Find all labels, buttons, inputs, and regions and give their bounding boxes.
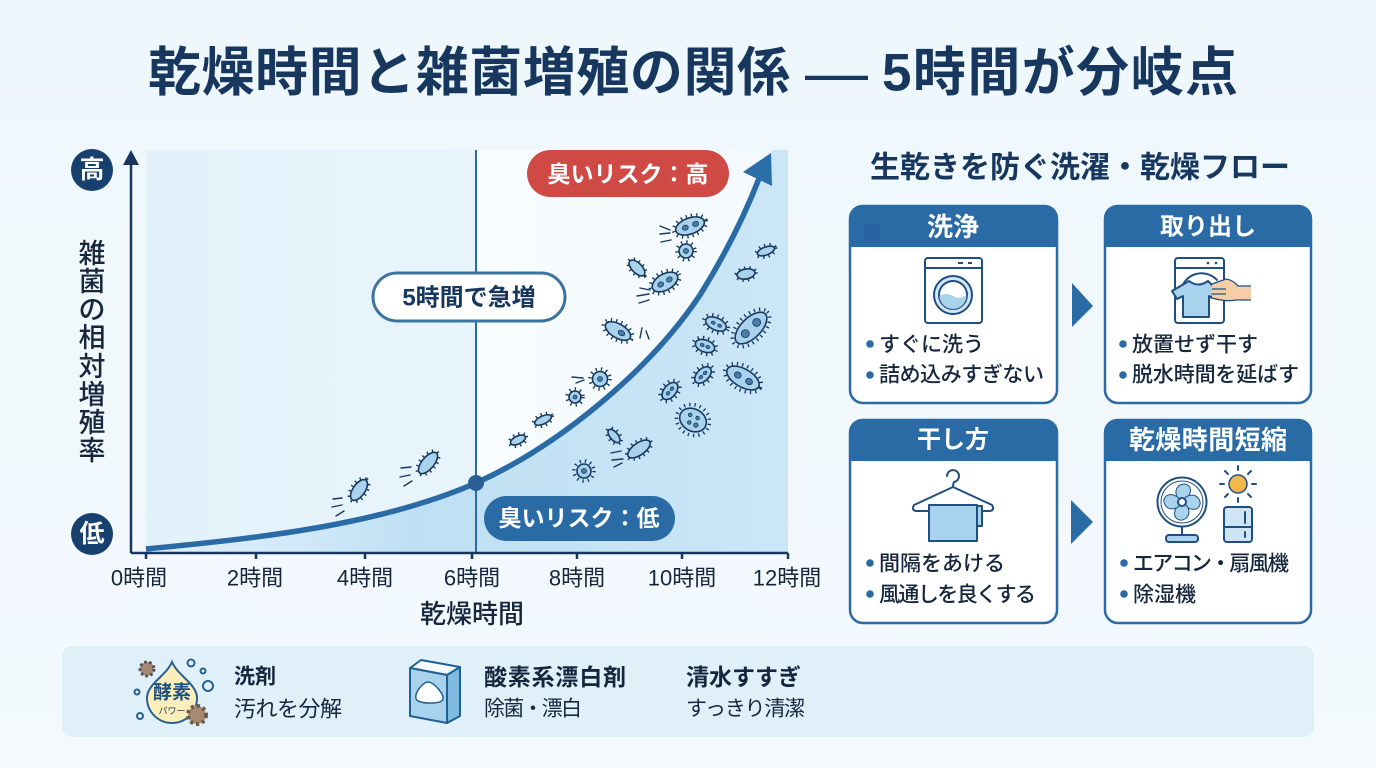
y axis label: 相	[78, 323, 106, 353]
card: hanging: 干し方	[917, 426, 989, 454]
icon: bleach box	[410, 660, 460, 723]
title	[148, 38, 1238, 108]
icon: sun	[1220, 466, 1256, 502]
icon: enzyme drop: パワー	[158, 706, 186, 716]
high badge	[71, 149, 113, 191]
card: take out	[1104, 205, 1312, 403]
5 hour marker line	[475, 150, 477, 553]
icon: fan	[1158, 478, 1206, 542]
x axis ticks: 12時間	[753, 566, 821, 590]
list	[866, 552, 1036, 606]
text: rinse	[686, 664, 805, 720]
card: shorten drying: 乾燥時間短縮	[1129, 425, 1287, 455]
card: wash: 洗浄	[927, 212, 979, 242]
x axis ticks: 4時間	[337, 566, 393, 590]
panel: flow	[849, 152, 1312, 623]
card: wash	[849, 205, 1058, 403]
text: detergent	[234, 666, 342, 722]
x axis label: 乾燥時間	[420, 599, 524, 629]
icon: hanger with towel	[913, 470, 993, 541]
high badge: 高	[79, 156, 105, 184]
y axis label: 雑	[78, 239, 106, 269]
title: 乾燥時間と雑菌増殖の関係	[148, 44, 790, 102]
chart background	[146, 150, 788, 553]
x axis ticks: 6時間	[444, 566, 500, 590]
list: 除湿機	[1133, 584, 1196, 606]
icon: enzyme drop: 酵素	[153, 682, 191, 704]
y axis label: 菌	[78, 267, 106, 297]
icon: taking out shirt	[1172, 258, 1251, 323]
list: 詰め込みすぎない	[879, 364, 1044, 386]
y axis label: 率	[78, 436, 106, 466]
arrow	[1072, 283, 1093, 327]
y axis label: 対	[78, 352, 106, 382]
panel: growth chart	[71, 149, 821, 629]
y axis label: 増	[78, 380, 106, 410]
list: エアコン・扇風機	[1133, 552, 1289, 576]
low badge	[71, 513, 113, 555]
x axis ticks	[111, 566, 821, 590]
text: oxygen bleach	[484, 664, 626, 720]
panel: bottom tips	[62, 646, 1314, 737]
callout: low risk: 臭いリスク：低	[498, 505, 660, 531]
text: detergent: 汚れを分解	[234, 696, 342, 722]
list	[1119, 334, 1299, 386]
x axis ticks: 0時間	[111, 566, 167, 590]
x axis	[131, 553, 788, 559]
title: 5時間が分岐点	[882, 44, 1238, 102]
flow heading: 生乾きを防ぐ洗濯・乾燥フロー	[870, 152, 1290, 184]
text: detergent: 洗剤	[234, 666, 276, 688]
list: 脱水時間を延ばす	[1132, 364, 1299, 386]
list: 風通しを良くする	[879, 584, 1036, 606]
callout: 5 hours: 5時間で急増	[402, 284, 536, 312]
card: take out: 取り出し	[1160, 214, 1256, 240]
text: rinse: 清水すすぎ	[686, 664, 801, 690]
y axis label: 殖	[78, 408, 106, 438]
list: 間隔をあける	[879, 552, 1005, 576]
list	[1120, 552, 1289, 606]
icon: enzyme drop	[134, 660, 213, 724]
x axis ticks: 2時間	[227, 566, 283, 590]
callout: 5 hours	[373, 273, 565, 321]
text: rinse: すっきり清潔	[686, 698, 805, 720]
bacteria cluster	[332, 211, 777, 516]
card: hanging	[849, 419, 1058, 623]
callout: high risk: 臭いリスク：高	[548, 161, 708, 187]
icon: dehumidifier	[1224, 507, 1252, 542]
title: ―	[805, 38, 868, 108]
arrow	[1071, 500, 1093, 544]
y axis label: の	[78, 295, 106, 325]
text: oxygen bleach: 除菌・漂白	[484, 698, 582, 720]
list: すぐに洗う	[879, 334, 984, 356]
x axis ticks: 8時間	[549, 566, 605, 590]
text: oxygen bleach: 酸素系漂白剤	[484, 664, 626, 690]
x axis ticks: 10時間	[648, 566, 716, 590]
growth curve	[146, 153, 772, 549]
list: 放置せず干す	[1132, 334, 1258, 356]
callout: high risk	[527, 150, 729, 197]
y axis	[123, 150, 139, 553]
callout: low risk	[484, 496, 675, 541]
list	[866, 334, 1044, 386]
low badge: 低	[79, 520, 105, 548]
card: shorten drying	[1104, 419, 1312, 623]
icon: washing machine	[925, 258, 982, 323]
